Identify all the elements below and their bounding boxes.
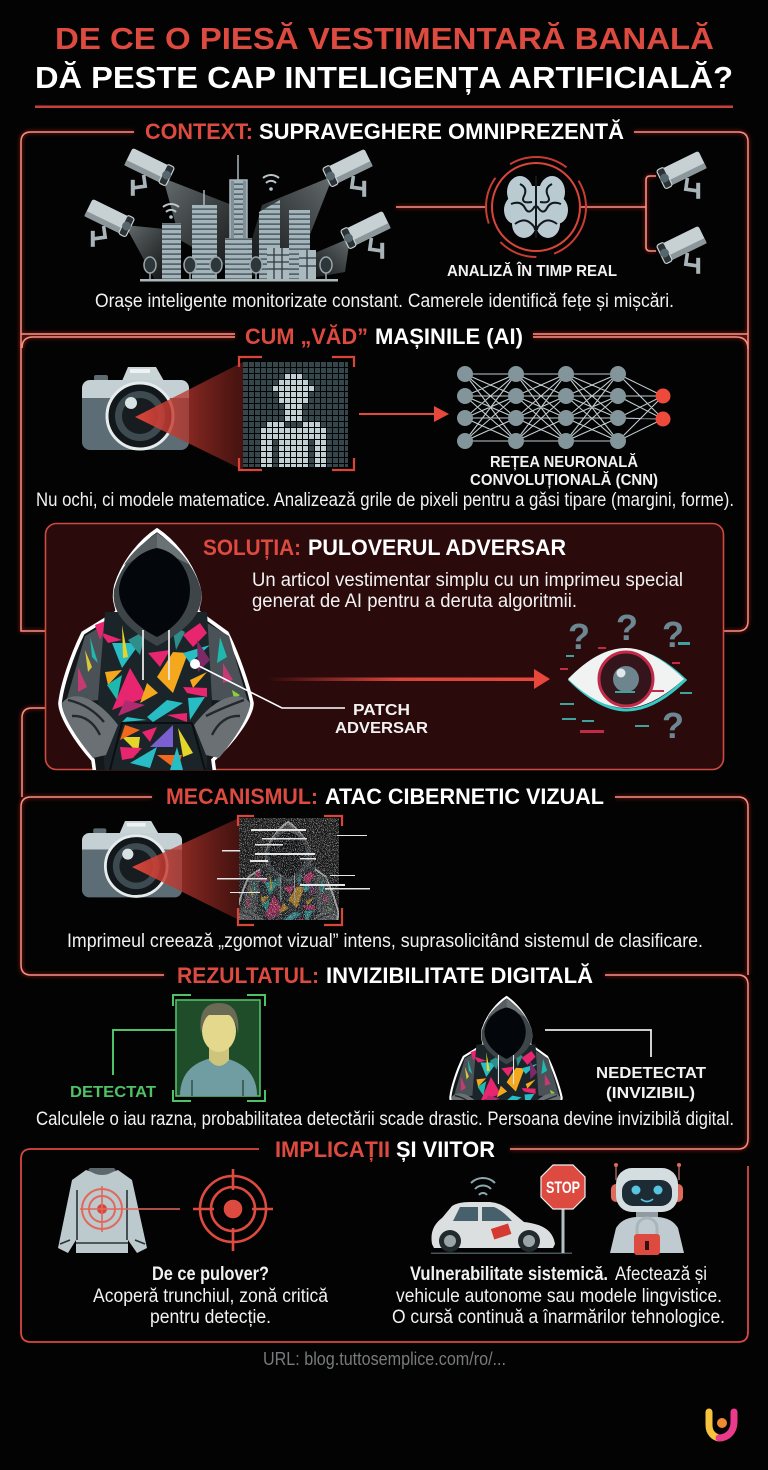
heading: context: CONTEXT:: [145, 119, 253, 144]
text: why a sweater: De ce pulover?: [152, 1264, 269, 1285]
callout: adversarial patch: [190, 659, 428, 737]
icon: detected person: [113, 995, 265, 1101]
label: undetected: (INVIZIBIL): [606, 1085, 695, 1102]
text: solution description: generat de AI pentru a deruta algoritmii.: [252, 591, 577, 612]
heading: mechanism: MECANISMUL:: [166, 784, 318, 809]
heading: mechanism: ATAC CIBERNETIC VIZUAL: [325, 784, 604, 809]
icon: sweater with target: [58, 1168, 180, 1253]
label: CNN: CONVOLUȚIONALĂ (CNN): [470, 470, 658, 489]
heading: implications: IMPLICAȚII: [275, 1137, 390, 1162]
icon: confused eye: ?: [616, 607, 638, 648]
panel: solution: [46, 524, 724, 775]
text: systemic vulnerability: Afectează și: [615, 1264, 707, 1285]
icon: hooded figure with adversarial sweater: [60, 530, 252, 775]
icon: undetected hooded figure: [449, 996, 563, 1100]
icon: target: [193, 1169, 273, 1251]
icon: logo: [709, 1412, 734, 1438]
heading: implications: [275, 1137, 495, 1162]
signal line: fading out: [370, 868, 608, 870]
heading: implications: ȘI VIITOR: [396, 1137, 495, 1162]
text: systemic vulnerability: vehicule autonome sau modele lingvistice.: [396, 1286, 722, 1307]
heading: solution: SOLUȚIA:: [203, 535, 301, 560]
icon: camera with beam: [82, 362, 243, 470]
title: DE CE O PIESĂ VESTIMENTARĂ BANALĂ: [55, 21, 714, 56]
title: [35, 21, 733, 95]
icon: confused eye: ?: [662, 614, 684, 655]
text: context description: Orașe inteligente monitorizate constant. Camerele identifică fețe și mișcări.: [95, 291, 674, 312]
label: CNN: REȚEA NEURONALĂ: [490, 452, 638, 471]
icon: autonomous car with stop sign: [431, 1165, 585, 1254]
callout: adversarial patch: ADVERSAR: [335, 720, 428, 737]
heading: result: INVIZIBILITATE DIGITALĂ: [326, 963, 593, 988]
icon: pixel grid silhouette: [239, 357, 354, 470]
arrow: patch to eye: [267, 669, 550, 689]
text: mechanism description: Imprimeul creează „zgomot vizual” intens, suprasolicitând sistemul de clasificare.: [67, 931, 703, 952]
icon: confused eye: ?: [568, 616, 590, 657]
heading: how machines see: CUM „VĂD”: [245, 324, 368, 349]
label: undetected: [596, 1065, 706, 1102]
icon: connected cameras: [656, 150, 707, 274]
text: systemic vulnerability: Vulnerabilitate sistemică.: [410, 1264, 608, 1285]
text: solution description: [252, 570, 683, 612]
label: undetected: NEDETECTAT: [596, 1065, 706, 1082]
text: why a sweater: pentru detecție.: [150, 1307, 271, 1328]
text: why a sweater: [93, 1264, 328, 1328]
text: why a sweater: Acoperă trunchiul, zonă critică: [93, 1286, 328, 1307]
text: systemic vulnerability: [392, 1264, 725, 1328]
heading: result: [177, 963, 593, 988]
heading: solution: PULOVERUL ADVERSAR: [308, 535, 566, 560]
label: real-time analysis: ANALIZĂ ÎN TIMP REAL: [447, 261, 617, 280]
icon: confused eye: [560, 607, 692, 746]
icon: city under surveillance: [84, 147, 391, 282]
text: solution description: Un articol vestimentar simplu cu un imprimeu special: [252, 570, 683, 591]
connector: city to brain to cameras: [396, 176, 656, 251]
chart: convolutional neural network: [457, 366, 670, 449]
text: systemic vulnerability: O cursă continuă a înarmărilor tehnologice.: [392, 1307, 725, 1328]
heading: solution: [203, 535, 566, 560]
heading: how machines see: MAȘINILE (AI): [375, 324, 523, 349]
icon: autonomous car with stop sign: STOP: [546, 1178, 580, 1197]
callout: adversarial patch: PATCH: [353, 702, 410, 719]
icon: robot with lock: [610, 1163, 684, 1255]
icon: glitched noise image: [217, 814, 370, 926]
icon: confused eye: ?: [662, 705, 684, 746]
title: DĂ PESTE CAP INTELIGENȚA ARTIFICIALĂ?: [35, 60, 733, 95]
heading: result: REZULTATUL:: [177, 963, 319, 988]
heading: context: SUPRAVEGHERE OMNIPREZENTĂ: [259, 119, 624, 144]
arrow: pixels to network: [359, 406, 449, 422]
footer url: URL: blog.tuttosemplice.com/ro/...: [263, 1349, 506, 1369]
heading: mechanism: [166, 784, 604, 809]
heading: how machines see: [245, 324, 523, 349]
label: CNN: [470, 452, 658, 489]
icon: brain in target ring: [486, 157, 586, 257]
connector: undetected label: [545, 1030, 651, 1057]
label: detected: DETECTAT: [70, 1084, 156, 1101]
icon: camera with beam: [82, 818, 239, 920]
